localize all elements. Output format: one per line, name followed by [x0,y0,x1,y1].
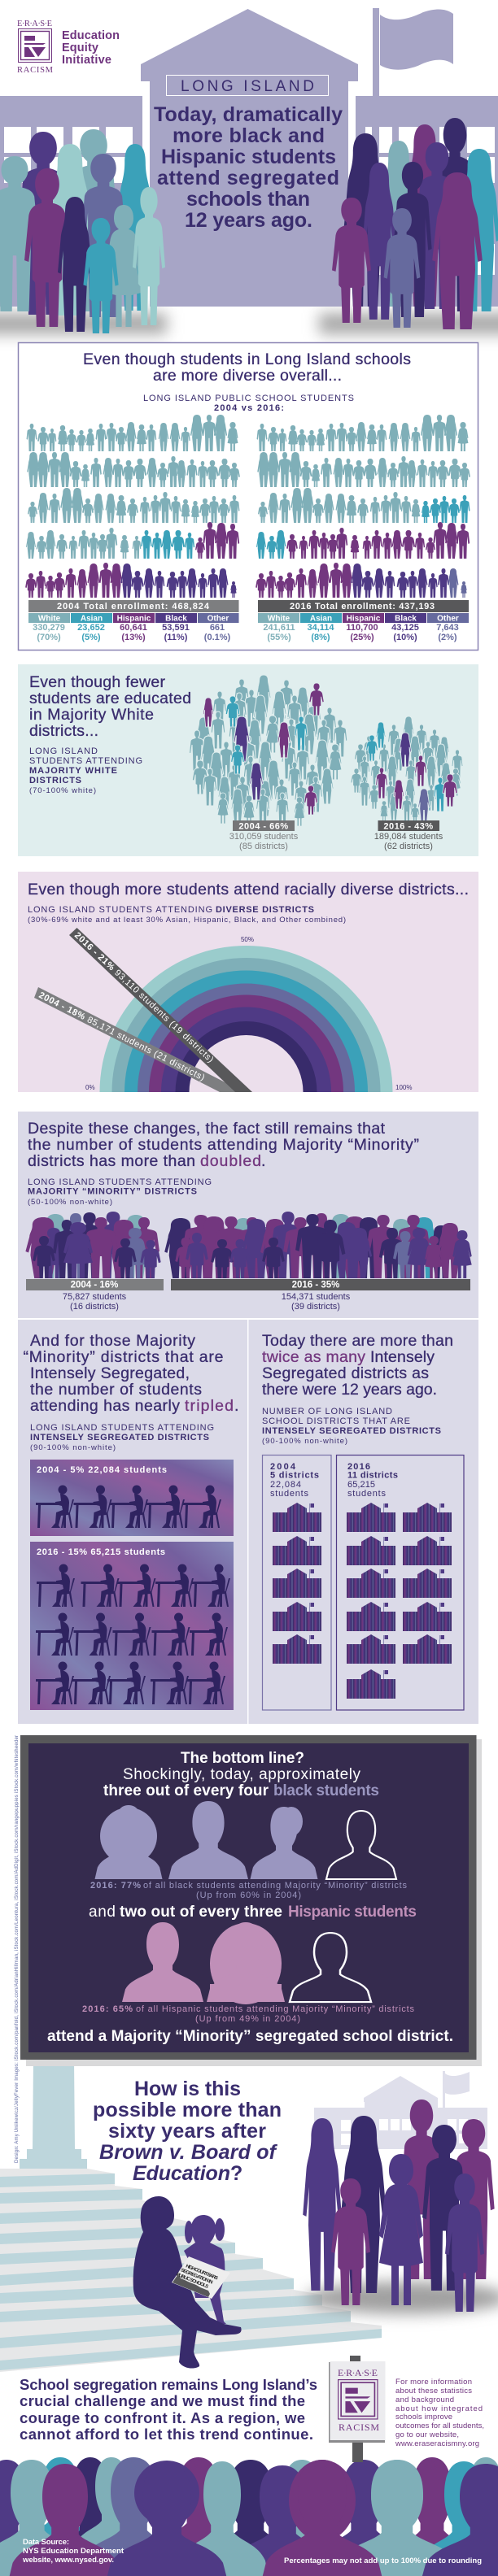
semicircle chart: 0% [85,1084,95,1091]
enrollment table 2004: (13%) [121,633,146,642]
enrollment table 2016: 2016 Total enrollment: 437,193 [290,602,435,611]
hispanic students caption: 2016: 65% [82,2004,133,2014]
people grid 2004 [25,415,240,598]
bar 2004: 75,827 students [63,1292,127,1302]
students left group [0,129,165,333]
bar 2004 [26,1279,164,1312]
initiative name: Equity [62,41,98,54]
hispanic line [89,1904,417,1921]
heading: are more diverse overall... [153,367,342,385]
panel shadow [26,1739,482,2066]
more information [395,2378,484,2448]
heading: students are educated [29,690,191,707]
sub heading: MAJORITY “MINORITY” DISTRICTS [28,1187,197,1197]
heading: attending has nearly [30,1397,180,1415]
people cloud 2004 [189,675,347,827]
heading: in Majority White [29,706,154,724]
black students caption: (Up from 60% in 2004) [196,1891,301,1900]
heading: there were 12 years ago. [262,1381,437,1399]
label 2004: 2004 - 66% [238,821,289,831]
label 2016: 2016 - 43% [383,821,434,831]
sub heading: LONG ISLAND [29,746,98,756]
ground shadow [305,2282,498,2314]
label 2004 [229,820,299,851]
classroom 2016 [30,1542,234,1710]
title: Today, dramatically [154,103,343,126]
lead text: black students [273,1782,379,1799]
school building [0,8,498,307]
more information: www.eraseracismny.org [395,2439,479,2448]
more information: go to our website, [395,2430,459,2439]
more information: about these statistics [395,2387,472,2395]
heading [29,673,191,740]
bar 2004: (16 districts) [70,1302,119,1312]
sub heading: (90-100% non-white) [30,1443,116,1452]
black students caption: of all black students attending Majority “Minority” districts [143,1881,407,1891]
woman on steps [133,2196,242,2369]
semicircle chart: 50% [241,936,254,943]
sub heading: (50-100% non-white) [28,1198,112,1207]
ground shadows [0,313,498,334]
people cloud 2016 [351,716,463,823]
newspaper [172,2256,230,2299]
initiative name: Initiative [62,54,111,67]
semicircle chart: 100% [395,1084,412,1091]
enrollment table 2016: Hispanic [347,615,381,623]
data source: website, www.nysed.gov. [22,2556,114,2565]
question text: sixty years after [108,2120,266,2143]
label 2016: (62 districts) [384,842,433,851]
more information: and background [395,2395,454,2404]
enrollment table 2004: Black [165,615,187,623]
classroom 2004: 2004 - 5% 22,084 students [37,1465,167,1475]
heading: districts has more than [28,1152,195,1170]
heading: And for those Majority [30,1332,195,1350]
sub heading [28,905,346,925]
crowd 2004 [25,1212,161,1278]
question text [93,2078,282,2185]
black students caption [90,1881,407,1900]
heading: Segregated districts as [262,1364,429,1382]
sub heading: STUDENTS ATTENDING [29,756,142,766]
enrollment table 2016 [258,600,469,642]
sub heading: (30%-69% white and at least 30% Asian, Hispanic, Black, and Other combined) [28,916,346,925]
title: 12 years ago. [185,209,312,232]
more information: For more information [395,2378,472,2387]
girl on steps [184,2215,226,2324]
more information: about how integrated [395,2404,483,2413]
classroom 2016: 2016 - 15% 65,215 students [37,1547,165,1557]
location label: LONG ISLAND [181,78,314,95]
black students busts [94,1801,396,1879]
district box 2016: 2016 [347,1462,370,1472]
school background [314,2071,487,2149]
heading: tripled [185,1397,234,1415]
heading: . [261,1152,265,1170]
crowd 2016 [164,1212,472,1278]
black students caption: 2016: 77% [90,1881,141,1891]
sub heading [28,1177,212,1207]
sub heading: (90-100% non-white) [262,1437,347,1446]
enrollment table 2016: 241,611 [263,623,295,633]
location label [166,75,329,96]
enrollment table 2016: (10%) [393,633,417,642]
enrollment table 2016: Asian [310,615,332,623]
enrollment table 2004: (11%) [164,633,188,642]
sub heading: 2004 vs 2016: [214,403,284,413]
heading: . [234,1397,238,1415]
sub heading: NUMBER OF LONG ISLAND [262,1407,392,1416]
enrollment table 2016: 34,114 [307,623,334,633]
enrollment table 2016: (25%) [350,633,374,642]
enrollment table 2016: Other [437,615,459,623]
heading: Even though students in Long Island schools [83,350,411,368]
students right group [332,118,498,329]
heading [83,350,411,385]
erase racism sign: E·R·A·S·E [338,2367,378,2378]
closing statement: School segregation remains Long Island’s [20,2376,317,2393]
classroom 2004 [30,1460,234,1536]
panel: bottom line [20,1735,482,2066]
enrollment table 2004: Other [208,615,229,623]
heading: Intensely [370,1348,435,1366]
panel fill [28,1743,469,2052]
label 2016: 189,084 students [374,832,443,842]
enrollment table 2004: (70%) [37,633,61,642]
heading: Despite these changes, the fact still remains that [28,1120,386,1138]
sub heading [143,394,354,413]
bottom audience crowd [0,2457,498,2576]
panel: majority minority districts [18,1112,478,1318]
newspaper: HIGH COURT BARS [185,2264,218,2282]
district box 2016: 65,215 [347,1480,375,1490]
sub heading: LONG ISLAND STUDENTS ATTENDING [30,1423,214,1433]
stair risers [0,2174,382,2370]
heading: Intensely Segregated, [30,1364,190,1382]
closing statement: cannot afford to let this trend continue. [20,2426,313,2443]
more information: schools improve [395,2413,452,2422]
heading [262,1332,453,1399]
hispanic line: and [89,1904,116,1921]
bar 2016: (39 districts) [291,1302,340,1312]
data source: NYS Education Department [23,2547,124,2556]
hispanic students busts [122,1922,371,2004]
sub heading: INTENSELY SEGREGATED DISTRICTS [30,1433,209,1442]
sub heading: LONG ISLAND PUBLIC SCHOOL STUDENTS [143,394,354,403]
title: attend segregated [157,167,339,189]
question text: Education [133,2162,230,2185]
sub heading [30,1423,214,1452]
panel: intensely segregated districts [249,1320,478,1724]
enrollment table 2004: 661 [210,623,225,633]
bar 2004: 2004 - 16% [71,1280,118,1290]
heading: Today there are more than [262,1332,453,1350]
district box 2016 [337,1456,464,1710]
enrollment table 2004 [28,600,239,642]
bar 2016: 2016 - 35% [292,1280,339,1290]
bar 2016 [171,1279,470,1312]
closing statement: crucial challenge and we must find the [20,2392,305,2409]
sub heading: LONG ISLAND STUDENTS ATTENDING [28,1177,212,1187]
heading: Even though more students attend racially diverse districts... [28,881,469,899]
enrollment table 2016: (2%) [438,633,457,642]
data source: Data Source: [23,2538,69,2547]
heading [23,1332,238,1415]
newspaper: PUBLIC SCHOOLS [176,2273,209,2290]
sub heading [262,1407,441,1446]
enrollment table 2016: Black [395,615,417,623]
data source [22,2538,124,2565]
sub heading: SCHOOL DISTRICTS THAT ARE [262,1416,410,1426]
photo credits: Design: Amy Uniikewicz/JellyFever Images: iStock.com/panfold, iStock.com/AdrianHillman, iStock.com/Leontura, iStock.com/AdDigit, iStock.com/rangepuppies iStock.com/whitesheeder [15,1735,20,2163]
more information: outcomes for all students, [395,2422,484,2430]
marker 2004: 2004 - 18% 85,171 students (21 districts) [37,990,206,1083]
label 2004: (85 districts) [239,842,288,851]
panel: intensely segregated students [18,1320,247,1724]
enrollment table 2004: 60,641 [120,623,147,633]
question text: possible more than [93,2099,282,2121]
lead text: The bottom line? [181,1750,304,1767]
heading: Even though fewer [29,673,166,691]
heading: the number of students [30,1381,202,1399]
hispanic students caption: (Up from 49% in 2004) [195,2014,300,2024]
people grid 2016 [256,415,470,598]
question text: Brown v. Board of [99,2141,278,2164]
lead text: three out of every four [103,1782,269,1799]
initiative name [62,29,120,67]
logo: Erase Racism: RACISM [17,66,54,75]
label 2004: 310,059 students [229,832,299,842]
enrollment table 2016: White [268,615,290,623]
label 2016 [374,820,443,851]
erase racism sign [329,2356,386,2462]
heading: the number of students attending Majority “Minority” [28,1136,419,1154]
column [20,2060,87,2169]
sub heading: MAJORITY WHITE [29,766,117,776]
marker 2016 [69,928,252,1092]
enrollment table 2004: (5%) [81,633,101,642]
semicircle chart [85,936,412,1092]
heading: “Minority” districts that are [23,1348,223,1366]
panel: majority white districts [18,664,478,856]
enrollment table 2016: (55%) [267,633,291,642]
district box 2004: 22,084 [270,1480,301,1490]
lead text: Shockingly, today, approximately [123,1766,361,1783]
marker 2016: 2016 - 21% 93,110 students (19 districts) [72,930,216,1064]
conclusion: attend a Majority “Minority” segregated school district. [47,2028,453,2045]
panel frame [20,1735,477,2060]
enrollment table 2004: 2004 Total enrollment: 468,824 [57,602,210,611]
enrollment table 2004: 23,652 [77,623,105,633]
panel: enrollment 2004 vs 2016 [18,343,478,651]
heading: doubled [200,1152,261,1170]
sub heading: LONG ISLAND STUDENTS ATTENDING [28,905,212,915]
title: schools than [186,188,310,211]
closing statement: courage to confront it. As a region, we [20,2409,305,2426]
enrollment table 2004: 53,591 [162,623,190,633]
accent students 2016 [366,722,457,821]
sub heading: INTENSELY SEGREGATED DISTRICTS [262,1426,441,1436]
closing statement [20,2376,317,2443]
question text: How is this [134,2078,241,2100]
bar 2016: 154,371 students [282,1292,351,1302]
newspaper: SEGREGATION IN [180,2268,213,2286]
question text: ? [230,2162,242,2185]
sub heading: DISTRICTS [29,776,81,785]
enrollment table 2004: White [38,615,61,623]
district box 2016: 11 districts [347,1470,398,1480]
district box 2004: students [270,1489,309,1499]
erase racism sign: RACISM [339,2422,379,2433]
panel: diverse districts [18,872,478,1092]
enrollment table 2016: (8%) [311,633,330,642]
title [154,103,343,232]
rounding note: Percentages may not add up to 100% due to rounding [284,2556,482,2565]
enrollment table 2004: (0.1%) [204,633,231,642]
logo: Erase Racism: E·R·A·S·E [17,20,52,28]
enrollment table 2016: 110,700 [346,623,378,633]
initiative name: Education [62,29,120,42]
enrollment table 2004: Hispanic [117,615,151,623]
district box 2004: 2004 [270,1462,296,1472]
stairs [0,2169,382,2372]
title: Hispanic students [161,146,336,168]
sub heading: (70-100% white) [29,786,96,795]
heading [28,1120,419,1170]
hispanic line: two out of every three [120,1904,282,1921]
district box 2004: 5 districts [270,1470,319,1480]
district box 2004 [262,1456,331,1710]
title: more black and [173,124,325,147]
hispanic line: Hispanic students [288,1904,417,1921]
panel: hero [0,8,498,334]
family silhouettes [303,2100,495,2312]
scene: courthouse steps [0,2060,382,2372]
heading: twice as many [262,1348,365,1366]
sub heading: DIVERSE DISTRICTS [216,905,314,915]
enrollment table 2016: 43,125 [391,623,419,633]
logo: Erase Racism [17,20,54,75]
enrollment table 2016: 7,643 [436,623,459,633]
scene: families and school [303,2071,498,2314]
enrollment table 2004: 330,279 [33,623,65,633]
enrollment table 2004: Asian [81,615,103,623]
hispanic students caption: of all Hispanic students attending Majority “Minority” districts [136,2004,414,2014]
heading: districts... [29,722,98,740]
sub heading [29,746,142,795]
district box 2016: students [347,1489,386,1499]
lead text [103,1750,379,1799]
hispanic students caption [82,2004,414,2024]
accent students 2004 [203,683,324,815]
